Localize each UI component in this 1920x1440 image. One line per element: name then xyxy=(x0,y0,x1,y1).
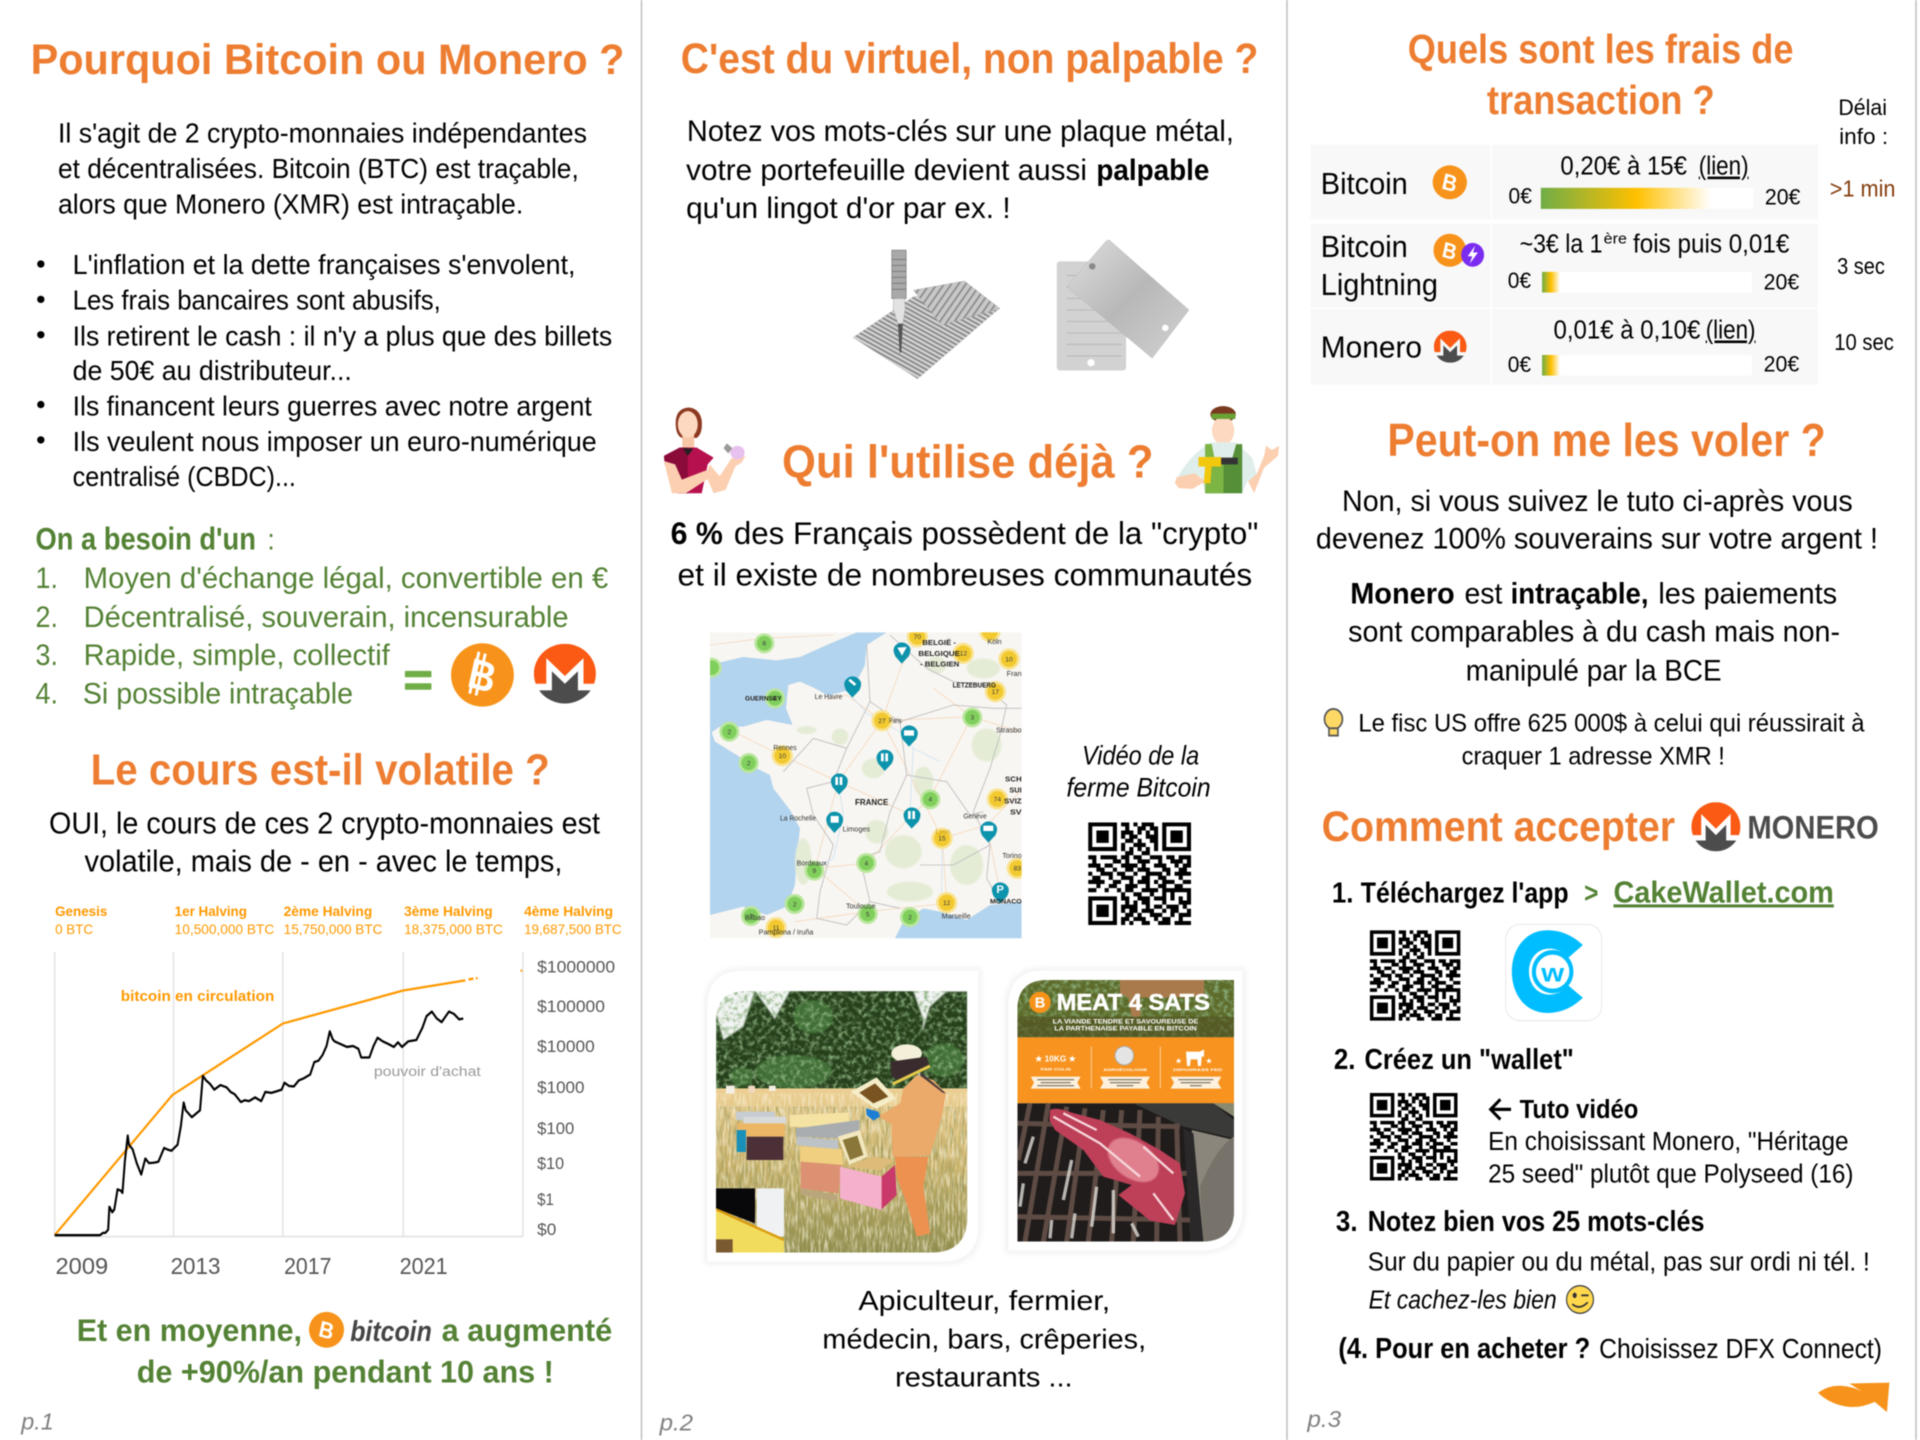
green needs list xyxy=(36,522,608,710)
volatility text: volatile, mais de - en - avec le temps, xyxy=(84,845,562,879)
map of France: 2 xyxy=(727,729,731,736)
green conclusion: B xyxy=(316,1315,336,1345)
heading: frais de transaction xyxy=(1408,27,1793,123)
y axis labels: $1 xyxy=(537,1191,554,1209)
halving labels: 10,500,000 BTC xyxy=(175,921,274,937)
map of France: - BELGIEN xyxy=(920,660,959,669)
bullet list of grievances: Ils financent leurs guerres avec notre argent xyxy=(73,390,592,422)
map of France: 2 xyxy=(908,914,912,921)
icon: bitcoin logo xyxy=(451,643,514,707)
step 4: Choisissez DFX Connect) xyxy=(1599,1332,1882,1364)
intro paragraph: Il s'agit de 2 crypto-monnaies indépendantes xyxy=(58,117,587,149)
black price line xyxy=(55,1012,463,1235)
list of merchants: restaurants ... xyxy=(895,1363,1073,1393)
heading: virtuel non palpable: C'est du virtuel, non palpable ? xyxy=(681,36,1258,83)
halving labels: 19,687,500 BTC xyxy=(524,921,622,937)
map of France: 74 xyxy=(994,796,1001,803)
step 1 heading: CakeWallet.com xyxy=(1613,876,1834,910)
map of France: Paris xyxy=(889,718,902,725)
chart: bitcoin supply and price xyxy=(55,903,622,1280)
map of France: FRANCE xyxy=(855,797,889,807)
x axis years xyxy=(56,1253,448,1280)
y axis labels: $100 xyxy=(537,1120,575,1138)
row: Bitcoin Lightning: 20€ xyxy=(1764,271,1800,295)
step 3: 3. xyxy=(1336,1206,1358,1237)
image: steel plates xyxy=(1057,240,1189,370)
theft answer xyxy=(1316,485,1878,555)
green needs list: 1. xyxy=(36,561,58,595)
crypto usage statistic: et il existe de nombreuses communautés xyxy=(678,558,1252,593)
tutorial note: Tuto vidéo xyxy=(1520,1096,1638,1124)
step 1 heading: Téléchargez l'app xyxy=(1361,877,1569,909)
halving labels xyxy=(55,903,622,937)
map of France: Bordeaux xyxy=(797,861,827,868)
QR code: farm video xyxy=(1088,822,1191,925)
map of France: 11 xyxy=(773,925,780,932)
photo: Meat 4 Sats: ★ xyxy=(1175,1056,1182,1065)
monero privacy paragraph: Monero xyxy=(1350,577,1455,610)
row: Bitcoin: 20€ xyxy=(1765,185,1801,210)
bullet list of grievances: centralisé (CBDC)... xyxy=(73,460,296,492)
icon: monero logo xyxy=(534,644,596,704)
icon: light bulb xyxy=(1324,709,1342,736)
video caption: Vidéo de la xyxy=(1082,741,1199,771)
metal plate text: qu'un lingot d'or par ex. ! xyxy=(686,192,1011,224)
row: Monero: Monero xyxy=(1321,331,1422,365)
crypto usage statistic xyxy=(671,517,1258,593)
panel: page 3 bottom xyxy=(1306,709,1889,1432)
map of France: 15 xyxy=(938,836,946,843)
video caption: ferme Bitcoin xyxy=(1067,773,1211,803)
green conclusion: Et en moyenne, xyxy=(77,1313,302,1348)
map of France: 4 xyxy=(928,797,932,804)
map of France: Genève xyxy=(963,814,987,821)
volatility text xyxy=(49,807,600,879)
map of France: Rennes xyxy=(773,745,797,752)
photo: Meat 4 Sats: ★ 10KG ★ xyxy=(1035,1055,1077,1064)
halving labels: Genesis xyxy=(55,903,107,919)
map of France: SUI xyxy=(1009,785,1022,794)
bullet list of grievances: L'inflation et la dette françaises s'envolent, xyxy=(73,249,576,280)
monero privacy paragraph: manipulé par la BCE xyxy=(1466,654,1722,687)
delay values xyxy=(1830,175,1896,355)
page number 3: p.3 xyxy=(1306,1406,1341,1432)
step 1 heading: > xyxy=(1584,877,1598,909)
y axis labels: $0 xyxy=(537,1221,557,1239)
delay column header: Délai xyxy=(1838,96,1887,120)
map of France: 9 xyxy=(812,868,816,875)
row: Bitcoin Lightning: B xyxy=(1440,238,1459,265)
row: Bitcoin: (lien) xyxy=(1699,152,1749,181)
icon: woman with perfume xyxy=(664,407,745,493)
theft answer: Non, si vous suivez le tuto ci-après vous xyxy=(1342,485,1853,517)
map of France: 2 xyxy=(747,760,751,767)
map of France: Köln xyxy=(987,639,1002,646)
bullet list of grievances: Ils veulent nous imposer un euro-numérique xyxy=(73,426,597,457)
x axis years: 2017 xyxy=(284,1253,331,1280)
row: Bitcoin: Bitcoin xyxy=(1321,167,1408,201)
delay values: 10 sec xyxy=(1834,329,1894,355)
step 3 xyxy=(1336,1206,1870,1315)
map of France: Le Havre xyxy=(815,694,842,701)
map of France: 5 xyxy=(866,911,870,918)
map of France: 70 xyxy=(914,634,921,641)
green needs list: 2. xyxy=(36,599,58,633)
map of France: 2 xyxy=(793,901,797,908)
metal plate text xyxy=(686,115,1234,224)
row: Monero xyxy=(1321,316,1800,377)
intro paragraph: alors que Monero (XMR) est intraçable. xyxy=(58,188,523,220)
row: Bitcoin: 0€ xyxy=(1509,184,1532,209)
map of France: Strasbo xyxy=(996,728,1022,735)
map of France: 7 xyxy=(749,913,753,920)
green needs list: 4. xyxy=(36,676,58,710)
row: Bitcoin: B xyxy=(1440,168,1460,197)
orange supply line xyxy=(55,978,478,1235)
map of France: GUERNSEY xyxy=(745,695,782,702)
US tax office bounty xyxy=(1358,709,1865,770)
step 2 heading: Créez un "wallet" xyxy=(1364,1044,1574,1075)
map of France: 12 xyxy=(960,651,967,658)
row: Bitcoin xyxy=(1321,152,1801,210)
page number 1: p.1 xyxy=(20,1408,54,1435)
tutorial note xyxy=(1488,1096,1853,1189)
green needs list: On a besoin d'un xyxy=(36,522,256,557)
heading: frais de transaction: Quels sont les frais de xyxy=(1408,27,1793,72)
US tax office bounty: Le fisc US offre 625 000$ à celui qui réussirait à xyxy=(1358,709,1865,737)
panel: page 2 top xyxy=(671,36,1258,593)
photo: Meat 4 Sats: B xyxy=(1035,996,1045,1012)
panel: page 3 top xyxy=(1311,27,1896,687)
heading: Comment accepter: Comment accepter xyxy=(1322,804,1675,851)
QR code: tutorial video xyxy=(1370,1093,1458,1181)
halving labels: 0 BTC xyxy=(55,921,93,937)
y axis labels: $10000 xyxy=(537,1038,595,1056)
equals sign xyxy=(405,671,431,690)
map of France: Marseille xyxy=(942,913,971,920)
volatility text: OUI, le cours de ces 2 crypto-monnaies est xyxy=(49,807,600,841)
map of France: 4 xyxy=(864,860,868,867)
heading: Peut-on me les voler: Peut-on me les voler ? xyxy=(1387,416,1826,467)
map of France: BELGIQUE xyxy=(918,649,960,658)
map of France: 6 xyxy=(762,641,766,648)
delay values: 3 sec xyxy=(1837,253,1885,279)
map of France: Lyon xyxy=(936,829,950,836)
monero privacy paragraph: les paiements xyxy=(1658,577,1837,610)
photo: beekeeper xyxy=(705,968,981,1264)
fee table xyxy=(1311,145,1818,385)
step 4: (4. Pour en acheter ? xyxy=(1338,1332,1590,1364)
step 1 heading: 1. xyxy=(1332,877,1353,909)
list of merchants: Apiculteur, fermier, xyxy=(858,1286,1110,1317)
heading: Qui l'utilise deja: Qui l'utilise déjà ? xyxy=(782,437,1153,488)
intro paragraph xyxy=(58,117,587,220)
map of France: 27 xyxy=(878,718,886,725)
map of France: 83 xyxy=(1014,866,1021,873)
map of France: 17 xyxy=(992,689,999,696)
photo: Meat 4 Sats xyxy=(1005,968,1245,1253)
icon: Cake Wallet app xyxy=(1506,924,1602,1021)
green needs list: Rapide, simple, collectif xyxy=(84,637,390,671)
row: Bitcoin Lightning: ère xyxy=(1604,230,1627,247)
y axis labels: $100000 xyxy=(537,998,605,1016)
delay values: >1 min xyxy=(1830,175,1896,202)
green needs list: : xyxy=(267,522,275,556)
map of France: Pamplona / Iruña xyxy=(759,929,813,936)
panel: page 1 bottom xyxy=(20,745,622,1435)
map of France: Limoges xyxy=(843,827,871,834)
column dividers xyxy=(642,0,1916,1440)
US tax office bounty: craquer 1 adresse XMR ! xyxy=(1462,742,1725,770)
y axis labels xyxy=(537,959,615,1239)
monero privacy paragraph: est xyxy=(1464,577,1503,610)
monero privacy paragraph: sont comparables à du cash mais non- xyxy=(1348,615,1840,648)
QR code: CakeWallet xyxy=(1370,930,1460,1021)
y axis labels: $10 xyxy=(537,1155,564,1173)
theft answer: devenez 100% souverains sur votre argent ! xyxy=(1316,522,1878,555)
chart annotations: pouvoir d'achat xyxy=(374,1063,481,1079)
map of France: LETZEBUERG xyxy=(953,680,996,689)
panel: page 2 bottom xyxy=(658,741,1211,1436)
photo: Meat 4 Sats: LA VIANDE TENDRE ET SAVOUREUSE DE xyxy=(1053,1019,1198,1026)
intro paragraph: et décentralisées. Bitcoin (BTC) est traçable, xyxy=(58,153,579,185)
heading: Le cours est-il volatile: Le cours est-il volatile ? xyxy=(91,745,550,794)
y axis labels: $1000 xyxy=(537,1079,585,1097)
green conclusion xyxy=(77,1312,612,1390)
green conclusion: bitcoin xyxy=(350,1315,432,1347)
x axis years: 2013 xyxy=(171,1253,220,1280)
halving labels: 18,375,000 BTC xyxy=(404,921,503,937)
map of France: 10 xyxy=(779,753,786,760)
row: Monero: 0,01€ à 0,10€ xyxy=(1553,316,1701,345)
icon: bitcoin logo: B xyxy=(464,650,500,703)
map of France: Bilbao xyxy=(745,915,765,922)
bullet list of grievances: de 50€ au distributeur... xyxy=(73,355,352,387)
green conclusion: de +90%/an pendant 10 ans ! xyxy=(137,1355,554,1390)
y axis labels: $1000000 xyxy=(537,959,615,977)
icon: Cake Wallet app: w xyxy=(1540,960,1565,987)
icon: man with drill xyxy=(1175,406,1279,493)
row: Bitcoin Lightning xyxy=(1321,230,1800,302)
green needs list: Décentralisé, souverain, incensurable xyxy=(84,599,569,633)
map of France: SCH xyxy=(1005,774,1022,783)
image: engraving punch and plates xyxy=(853,250,1000,379)
step 4 xyxy=(1338,1332,1882,1364)
map of France: MONACO xyxy=(990,899,1022,906)
photo: Meat 4 Sats: ★ xyxy=(1205,1056,1213,1065)
map of France xyxy=(702,621,1028,938)
photo: Meat 4 Sats: 100%GRASS FED xyxy=(1173,1067,1223,1072)
row: Bitcoin Lightning: Lightning xyxy=(1321,268,1438,302)
row: Bitcoin Lightning: 0€ xyxy=(1508,269,1531,293)
halving labels: 4ème Halving xyxy=(524,903,613,919)
tutorial note: En choisissant Monero, "Héritage xyxy=(1488,1128,1849,1157)
map of France: P xyxy=(996,884,1004,896)
crypto usage statistic: des Français possèdent de la "crypto" xyxy=(734,517,1258,552)
halving labels: 3ème Halving xyxy=(404,903,493,919)
step 2 heading: 2. xyxy=(1334,1044,1356,1075)
step 1 heading xyxy=(1332,876,1834,910)
chart annotations xyxy=(121,970,522,1079)
photo: Meat 4 Sats: MEAT 4 SATS xyxy=(1057,989,1210,1015)
map of France: Toulouse xyxy=(846,903,876,910)
photo: Meat 4 Sats: LA PARTHENAISE PAYABLE EN BITCOIN xyxy=(1054,1026,1197,1033)
row: Bitcoin: 0,20€ à 15€ xyxy=(1560,152,1687,181)
x axis years: 2009 xyxy=(56,1253,108,1280)
icon: wink emoji xyxy=(1567,1286,1593,1313)
map of France: La Rochelle xyxy=(780,815,816,822)
list of merchants xyxy=(822,1286,1146,1393)
green conclusion: a augmenté xyxy=(442,1313,612,1348)
metal plate text: votre portefeuille devient aussi xyxy=(686,154,1087,186)
halving labels: 1er Halving xyxy=(175,903,247,919)
video caption xyxy=(1067,741,1211,803)
halving labels: 15,750,000 BTC xyxy=(284,921,382,937)
list of merchants: médecin, bars, crêperies, xyxy=(822,1325,1146,1355)
map of France: 4 xyxy=(773,696,777,703)
delay column header: info : xyxy=(1839,125,1888,149)
step 3: Et cachez-les bien xyxy=(1369,1286,1557,1315)
map of France: Torino xyxy=(1002,853,1022,860)
row: Bitcoin Lightning: ~3€ la 1 xyxy=(1520,230,1602,259)
crypto usage statistic: 6 % xyxy=(671,517,723,552)
row: Monero: 20€ xyxy=(1764,352,1800,377)
map of France: Fran xyxy=(1007,671,1022,678)
step 3: Sur du papier ou du métal, pas sur ordi ni tél. ! xyxy=(1368,1248,1870,1277)
title: Pourquoi Bitcoin ou Monero: Pourquoi Bitcoin ou Monero ? xyxy=(31,37,624,83)
metal plate text: Notez vos mots-clés sur une plaque métal, xyxy=(687,115,1234,147)
x axis years: 2021 xyxy=(400,1253,448,1280)
row: Monero: (lien) xyxy=(1706,316,1756,345)
green needs list: Moyen d'échange légal, convertible en € xyxy=(84,561,608,595)
page number 2: p.2 xyxy=(658,1410,693,1436)
row: Bitcoin Lightning: fois puis 0,01€ xyxy=(1633,230,1790,259)
monero privacy paragraph: intraçable, xyxy=(1511,577,1649,610)
row: Monero: 0€ xyxy=(1508,353,1531,377)
map of France: 3 xyxy=(970,715,974,722)
map of France: SVIZ xyxy=(1004,796,1022,805)
bullet list of grievances: Ils retirent le cash : il n'y a plus que des billets xyxy=(73,320,612,352)
green needs list: 3. xyxy=(36,637,58,671)
logo: Monero: MONERO xyxy=(1747,810,1879,846)
halving labels: 2ème Halving xyxy=(284,903,372,919)
tutorial note: 25 seed" plutôt que Polyseed (16) xyxy=(1488,1160,1853,1189)
delay column header xyxy=(1838,96,1888,149)
green needs list: Si possible intraçable xyxy=(83,676,353,710)
map of France: BELGIË - xyxy=(922,638,957,647)
chart annotations: bitcoin en circulation xyxy=(121,987,274,1004)
bullet list of grievances xyxy=(37,249,612,492)
panel: page 1 top xyxy=(31,37,624,710)
map of France: SV xyxy=(1010,808,1022,817)
step 3: Notez bien vos 25 mots-clés xyxy=(1368,1206,1704,1237)
logo: Monero xyxy=(1691,802,1879,851)
map of France: 12 xyxy=(943,900,951,907)
photo: Meat 4 Sats: PAR COLIS xyxy=(1041,1066,1071,1071)
heading: frais de transaction: transaction ? xyxy=(1487,78,1715,123)
monero privacy paragraph xyxy=(1348,577,1840,687)
bullet list of grievances: Les frais bancaires sont abusifs, xyxy=(73,284,441,316)
row: Bitcoin Lightning: Bitcoin xyxy=(1321,231,1408,265)
map of France: 10 xyxy=(1005,656,1013,663)
arrow: next page xyxy=(1818,1383,1889,1412)
photo: Meat 4 Sats: AGROÉCOLOGIE xyxy=(1103,1067,1148,1072)
metal plate text: palpable xyxy=(1096,154,1209,186)
